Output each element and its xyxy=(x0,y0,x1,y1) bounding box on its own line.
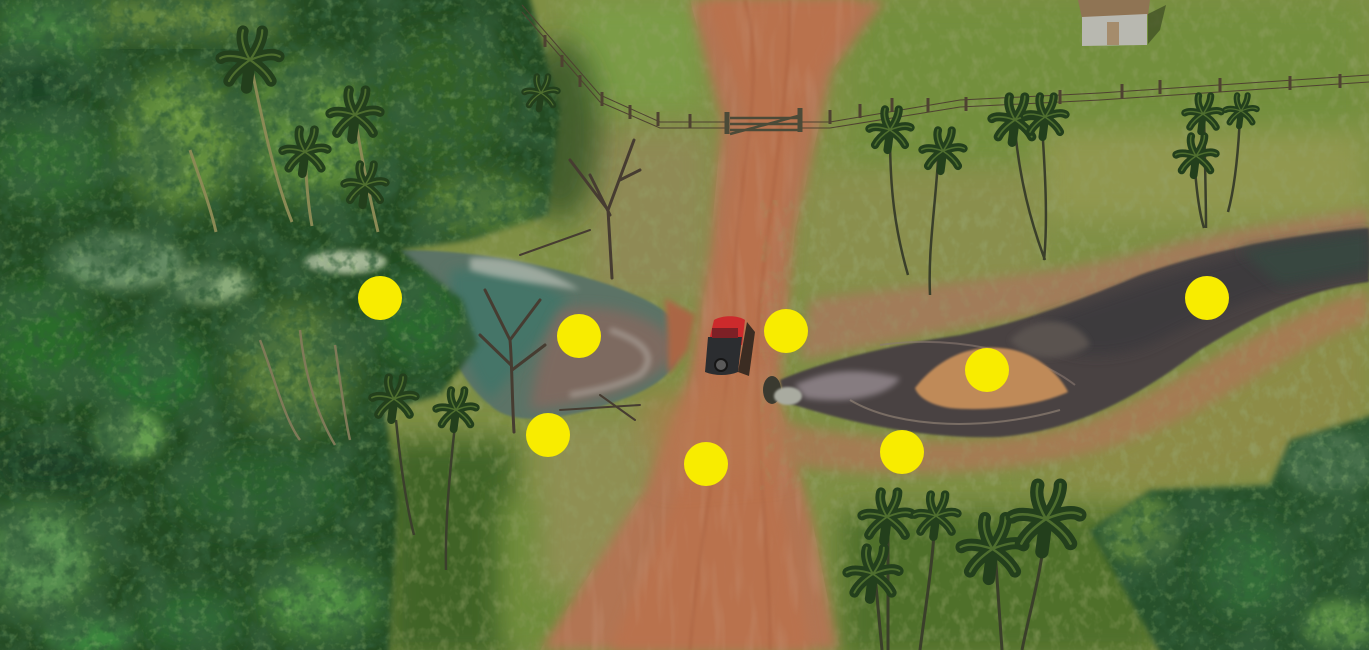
marker 1 xyxy=(358,276,402,320)
marker 3 xyxy=(764,309,808,353)
yellow markers xyxy=(358,276,1229,486)
river: right muddy stream xyxy=(780,228,1369,437)
marker 4 xyxy=(965,348,1009,392)
marker 7 xyxy=(684,442,728,486)
marker 8 xyxy=(880,430,924,474)
palms: lower right xyxy=(847,484,1081,650)
river: left pool xyxy=(400,250,695,419)
house xyxy=(1078,0,1166,46)
marker 6 xyxy=(526,413,570,457)
marker 2 xyxy=(557,314,601,358)
sandbar xyxy=(915,348,1068,409)
vehicle: red jeep xyxy=(705,316,755,376)
palms: lower left xyxy=(372,377,476,570)
marker 5 xyxy=(1185,276,1229,320)
bare trees xyxy=(480,140,640,432)
gate xyxy=(727,108,800,134)
vine tree xyxy=(260,330,350,445)
fence xyxy=(522,5,1369,128)
forest palm crowns xyxy=(220,30,386,205)
culvert xyxy=(763,376,802,405)
forest: left rainforest xyxy=(0,0,600,650)
shadow along forest edge xyxy=(520,40,600,220)
forest: lower right xyxy=(1080,405,1369,650)
forest palm stems xyxy=(190,60,378,232)
muddy banks xyxy=(640,200,1369,490)
dirt road xyxy=(538,0,886,650)
palms: upper right xyxy=(524,76,1257,295)
